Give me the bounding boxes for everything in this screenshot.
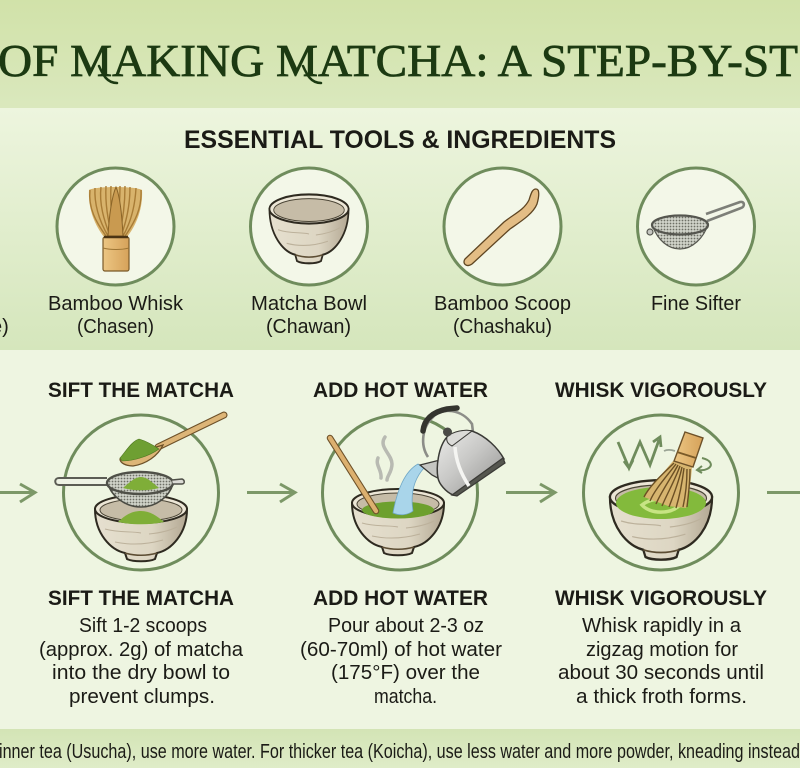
- step 1 text block: SIFT THE MATCHA: [48, 587, 234, 610]
- tool: bamboo whisk: [57, 168, 174, 285]
- step 3 text block: WHISK VIGOROUSLY: [555, 587, 767, 610]
- footer band: [0, 729, 800, 768]
- step 1 text block: prevent clumps.: [69, 686, 215, 708]
- step 3 text block: zigzag motion for: [586, 639, 738, 661]
- step 3 illustration: whisk: [584, 415, 738, 570]
- step 3 text block: a thick froth forms.: [576, 686, 747, 708]
- header band: [0, 0, 800, 108]
- tools panel background: [0, 108, 800, 350]
- tool sublabel: chasen: (Chasen): [77, 316, 154, 338]
- step 2 text block: (175°F) over the: [331, 662, 480, 684]
- title: OF MAKING MATCHA: A STEP-BY-ST: [0, 35, 798, 86]
- heading: essential tools: ESSENTIAL TOOLS & INGREDIENTS: [184, 126, 616, 154]
- step 1 text block: into the dry bowl to: [52, 662, 230, 684]
- tool: bamboo scoop: [444, 168, 561, 285]
- tool sublabel: chashaku: (Chashaku): [453, 316, 552, 338]
- arrow: step 3 onward: [767, 491, 800, 494]
- tool label: matcha bowl: Matcha Bowl: [251, 293, 367, 315]
- step 1 text block: Sift 1-2 scoops: [79, 615, 207, 637]
- step 1 heading: SIFT THE MATCHA: [48, 379, 234, 402]
- tool label: bamboo whisk: Bamboo Whisk: [48, 293, 184, 315]
- step 3 heading: WHISK VIGOROUSLY: [555, 379, 767, 402]
- tool sublabel: chawan: (Chawan): [266, 316, 351, 338]
- steps panel background: [0, 350, 800, 729]
- arrow: step 1 to 2: [247, 484, 295, 502]
- step 3 text block: Whisk rapidly in a: [582, 615, 742, 637]
- arrow: step 2 to 3: [506, 484, 555, 502]
- step 1 text block: (approx. 2g) of matcha: [39, 639, 244, 661]
- step 2 text block: matcha.: [374, 686, 437, 708]
- step 2 illustration: add hot water: [322, 408, 505, 570]
- step 2 text block: ADD HOT WATER: [313, 587, 488, 610]
- tool label: bamboo scoop: Bamboo Scoop: [434, 293, 571, 315]
- step 3 text block: about 30 seconds until: [558, 662, 764, 684]
- step 1 text block: [39, 587, 244, 708]
- step 3 text block: [555, 587, 767, 708]
- tool label: fine sifter: Fine Sifter: [651, 293, 741, 315]
- step 2 text block: (60-70ml) of hot water: [300, 639, 502, 661]
- tool: matcha bowl: [250, 168, 368, 285]
- step 2 text block: Pour about 2-3 oz: [328, 615, 484, 637]
- tool: fine sifter: [638, 168, 754, 285]
- arrow: into step 1: [0, 484, 35, 502]
- step 2 text block: [300, 587, 502, 708]
- step 1 illustration: sift: [55, 415, 224, 570]
- step 2 heading: ADD HOT WATER: [313, 379, 488, 402]
